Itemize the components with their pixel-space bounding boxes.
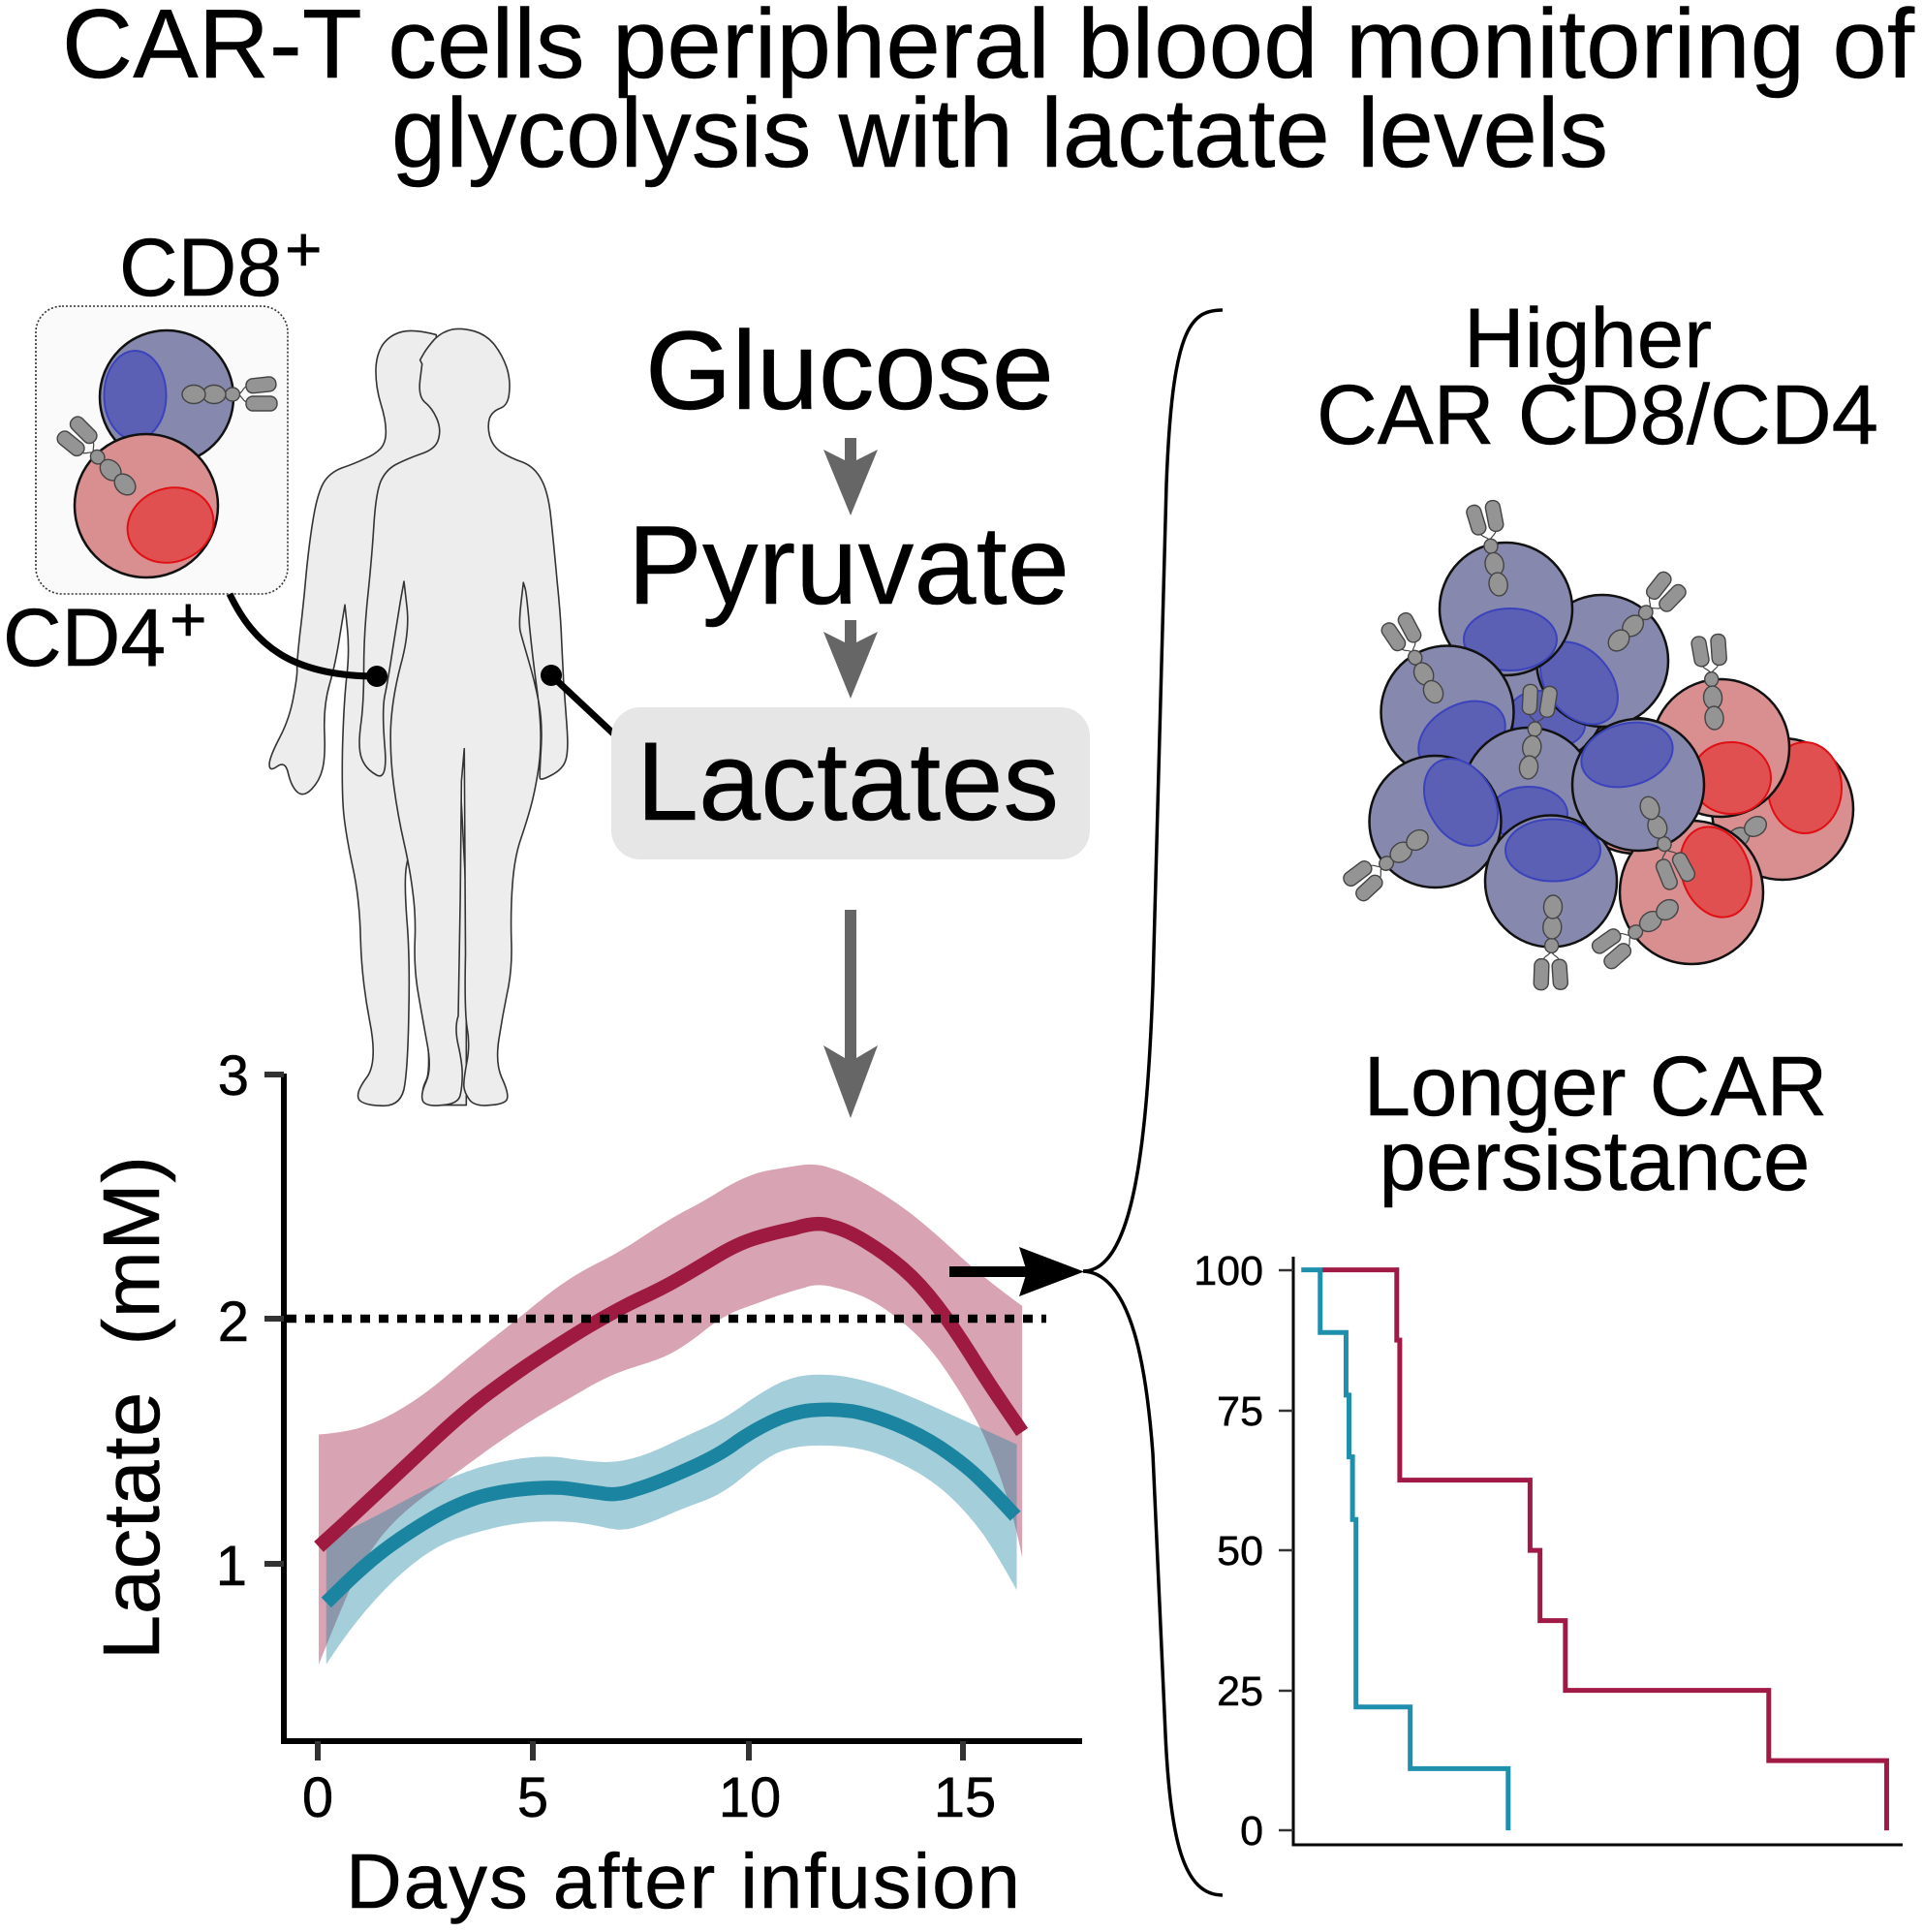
y tick labels: 2 — [218, 1291, 249, 1354]
connector: body to lactates — [541, 665, 613, 733]
text: Glucose: Glucose — [645, 309, 1054, 433]
label: CD4+: + — [170, 583, 207, 655]
x tick labels: 10 — [719, 1766, 781, 1829]
CAR on right red cell — [1677, 806, 1775, 888]
line: high lactate — [319, 1224, 1022, 1546]
hidden blue cell — [1474, 632, 1606, 763]
CAR on upper right blue cell — [1597, 568, 1689, 660]
label: CD8+: + — [285, 213, 323, 285]
y tick labels: 75 — [1217, 1388, 1263, 1435]
human silhouettes — [269, 328, 568, 1106]
panel: CD8 and CD4 cell inset — [36, 306, 288, 594]
y tick labels: 50 — [1217, 1528, 1263, 1574]
connector: inset to body — [230, 594, 388, 687]
title — [62, 0, 1915, 188]
line: low lactate — [326, 1410, 1015, 1603]
y tick labels: 3 — [218, 1044, 249, 1107]
y tick labels: 0 — [1240, 1808, 1263, 1854]
heading: higher CAR CD8/CD4 — [1317, 292, 1878, 462]
bracket — [1083, 310, 1223, 1895]
chart: persistence curves — [1194, 1248, 1903, 1854]
axes — [1293, 1257, 1903, 1845]
text: Pyruvate: Pyruvate — [628, 504, 1070, 628]
x tick labels — [302, 1766, 996, 1829]
y tick labels: 25 — [1217, 1668, 1263, 1715]
curve: red — [1321, 1270, 1886, 1830]
blue cell upper right — [1525, 595, 1668, 739]
curve: teal — [1301, 1270, 1508, 1830]
y tick labels — [1194, 1248, 1263, 1854]
ticks — [1279, 1270, 1293, 1830]
arrow: lactates to chart — [823, 910, 878, 1118]
blue cell centre right — [1572, 713, 1704, 851]
arrow: glucose to pyruvate — [823, 438, 878, 515]
heading: higher CAR CD8/CD4: CAR CD8/CD4 — [1317, 368, 1878, 462]
survival curves — [1301, 1270, 1886, 1830]
blue cell centre — [1463, 728, 1595, 859]
title: glycolysis with lactate levels — [391, 79, 1608, 188]
blue cell top — [1440, 543, 1572, 675]
y tick labels — [216, 1044, 249, 1598]
heading: higher CAR CD8/CD4: Higher — [1464, 292, 1712, 386]
axes — [281, 1074, 1082, 1742]
label: CD4+: CD4 — [3, 592, 166, 683]
CD8 cell — [100, 330, 233, 464]
CAR receptors — [1341, 499, 1731, 991]
x tick labels: 0 — [302, 1766, 333, 1829]
x tick labels: 5 — [517, 1766, 548, 1829]
front silhouette — [359, 328, 568, 1106]
band: low lactate — [326, 1375, 1017, 1665]
heading: longer CAR persistance — [1364, 1040, 1827, 1208]
CAR on CD4 cell — [53, 414, 145, 506]
x tick labels: 15 — [934, 1766, 996, 1829]
threshold line at 2 mM — [287, 1315, 1046, 1323]
blue cell lower left — [1370, 745, 1512, 888]
confidence bands — [319, 1165, 1022, 1665]
arrow: chart to bracket — [949, 1247, 1084, 1296]
label: CD8+: CD8 — [119, 222, 282, 313]
arrow: pyruvate to lactates — [823, 620, 878, 699]
chart: lactate over days — [86, 1044, 1082, 1924]
heading: longer CAR persistance: Longer CAR — [1364, 1040, 1827, 1134]
blue cell bottom — [1485, 816, 1617, 948]
hidden red cell — [1567, 718, 1703, 854]
blue cell left — [1381, 645, 1518, 789]
heading: longer CAR persistance: persistance — [1380, 1114, 1810, 1208]
red cell right — [1712, 738, 1853, 880]
axis ticks — [264, 1075, 963, 1761]
red cell bottom — [1620, 817, 1763, 964]
CD4 cell — [75, 434, 224, 577]
inset box — [36, 306, 288, 594]
CAR on CD8 cell — [182, 376, 277, 411]
x axis title: Days after infusion — [346, 1838, 1020, 1924]
band: high lactate — [319, 1165, 1022, 1665]
cell cluster — [1341, 499, 1853, 991]
y tick labels: 1 — [216, 1535, 247, 1598]
back silhouette — [269, 330, 466, 1106]
red cell upper right — [1652, 679, 1789, 817]
y axis title: Lactate (mM) — [86, 1156, 176, 1660]
lactates box: Lactates — [636, 720, 1059, 844]
y tick labels: 100 — [1194, 1248, 1263, 1294]
